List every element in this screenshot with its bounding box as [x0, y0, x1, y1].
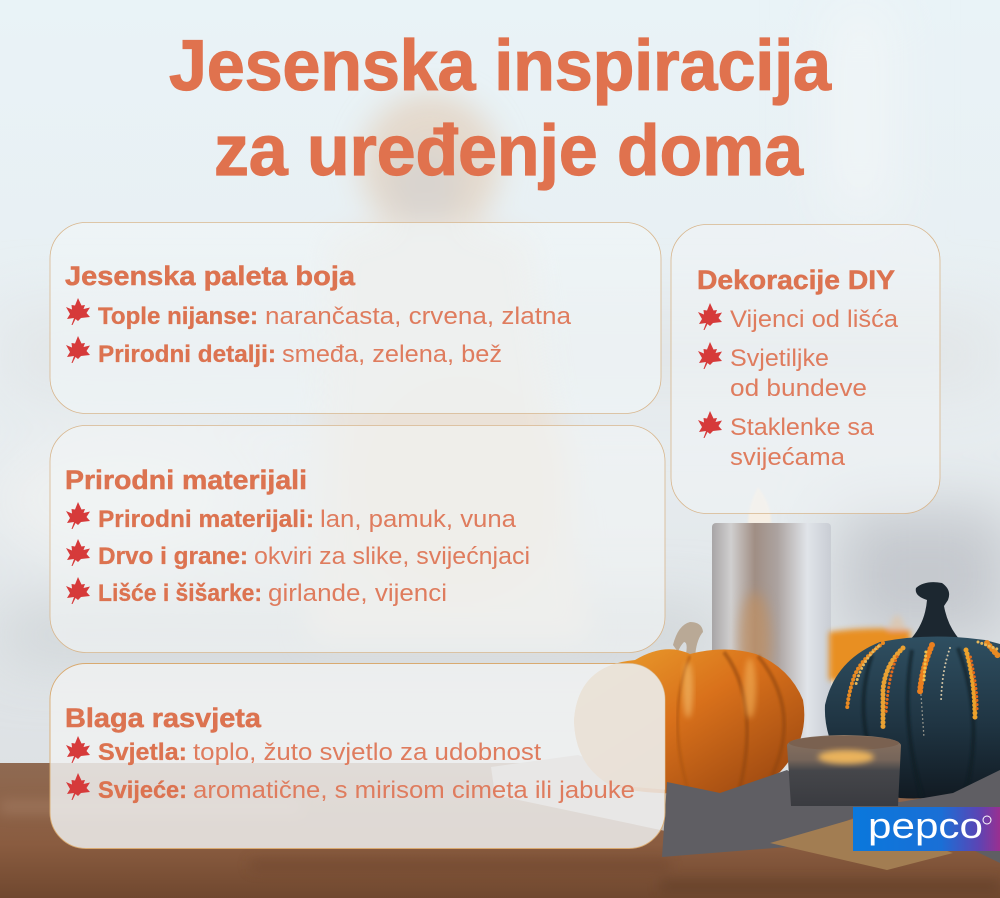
item: lišće i šišarke: girlande, vijenci	[268, 580, 447, 607]
item: drvo i grane: okviri za slike, svijećnjaci	[254, 543, 530, 570]
item: drvo i grane: Drvo i grane:	[98, 543, 248, 570]
item: prirodni detalji: smeđa, zelena, bež	[282, 341, 502, 368]
item: lišće i šišarke: Lišće i šišarke:	[98, 580, 262, 607]
item: svijeće: Svijeće:	[98, 777, 187, 804]
item: prirodni detalji: Prirodni detalji:	[98, 341, 276, 368]
item: tople nijanse: narančasta, crvena, zlatna	[265, 303, 572, 330]
item: svjetiljke	[698, 342, 867, 402]
heading: Dekoracije DIY	[697, 265, 895, 295]
book	[770, 819, 953, 870]
item: staklenke: Staklenke sa	[730, 414, 875, 441]
white tray	[491, 755, 670, 832]
logo: pepco: pepco	[868, 805, 983, 846]
item: svjetiljke: Svjetiljke	[730, 345, 829, 372]
item: staklenke: svijećama	[730, 444, 846, 471]
item: prirodni materijali	[66, 502, 517, 533]
title: Jesenska inspiracija	[169, 27, 831, 106]
item: lišće i šišarke	[66, 577, 447, 607]
panel: Blaga rasvjeta	[50, 655, 670, 848]
item: svjetla: toplo, žuto svjetlo za udobnost	[193, 739, 541, 766]
candle flame	[748, 487, 771, 524]
item: svijeće: aromatične, s mirisom cimeta ili jabuke	[193, 777, 635, 804]
item: svjetla	[66, 736, 541, 766]
item: prirodni materijali: lan, pamuk, vuna	[320, 506, 517, 533]
pale pumpkin seen through the panel	[574, 664, 665, 790]
item: prirodni detalji	[66, 336, 502, 368]
title: za uređenje doma	[214, 112, 803, 191]
glass candle holder	[787, 735, 901, 806]
silver candle	[712, 523, 831, 748]
item: tople nijanse	[66, 298, 572, 330]
item: prirodni materijali: Prirodni materijali:	[98, 506, 314, 533]
grey cloth	[662, 770, 1000, 863]
orange pumpkin	[574, 622, 804, 794]
table	[0, 763, 1000, 898]
illustration: candle, pumpkins and glass	[574, 487, 1000, 870]
panel: Prirodni materijali	[50, 426, 665, 652]
item: svjetiljke: od bundeve	[730, 375, 867, 402]
heading: Prirodni materijali	[65, 465, 307, 495]
item: svijeće	[66, 773, 635, 804]
title	[169, 27, 831, 191]
panel: Jesenska paleta boja	[50, 222, 661, 414]
heading: Blaga rasvjeta	[65, 703, 262, 733]
logo: pepco	[853, 805, 1000, 851]
background orange pumpkin	[829, 615, 910, 690]
item: svjetla: Svjetla:	[98, 739, 187, 766]
item: drvo i grane	[66, 539, 530, 570]
blurred person	[310, 93, 590, 640]
item: staklenke	[698, 411, 875, 471]
item: tople nijanse: Tople nijanse:	[98, 303, 258, 330]
panel: Dekoracije DIY	[671, 224, 940, 514]
item: vijenci: Vijenci od lišća	[730, 306, 899, 333]
dark glitter pumpkin	[825, 582, 1000, 798]
heading: Jesenska paleta boja	[65, 261, 356, 291]
